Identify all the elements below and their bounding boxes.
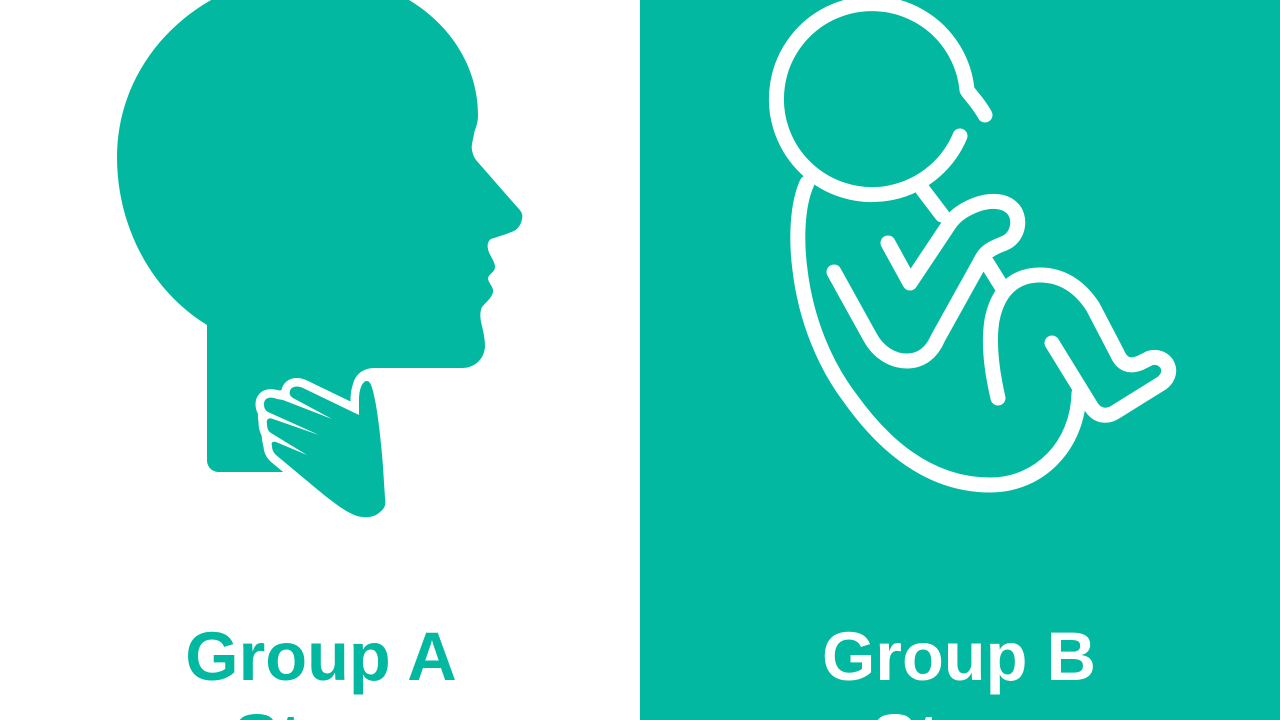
icon: baby outline (776, 4, 1169, 485)
hand outline (264, 381, 385, 517)
baby arm and hand (834, 201, 1018, 361)
head and neck silhouette (117, 0, 522, 472)
heading: Group A Strep: Group A (185, 618, 457, 695)
baby head (776, 4, 985, 195)
baby leg and foot (990, 275, 1169, 415)
panel: Group B (640, 0, 1280, 720)
baby connector between arm and leg (987, 263, 1002, 287)
baby body (798, 183, 1079, 485)
icon: head in profile with hand on throat (117, 0, 522, 517)
heading: Group B Strep: Group B (822, 618, 1096, 695)
panel: Group A (0, 0, 640, 720)
baby neck (923, 190, 942, 215)
hand (264, 381, 385, 517)
